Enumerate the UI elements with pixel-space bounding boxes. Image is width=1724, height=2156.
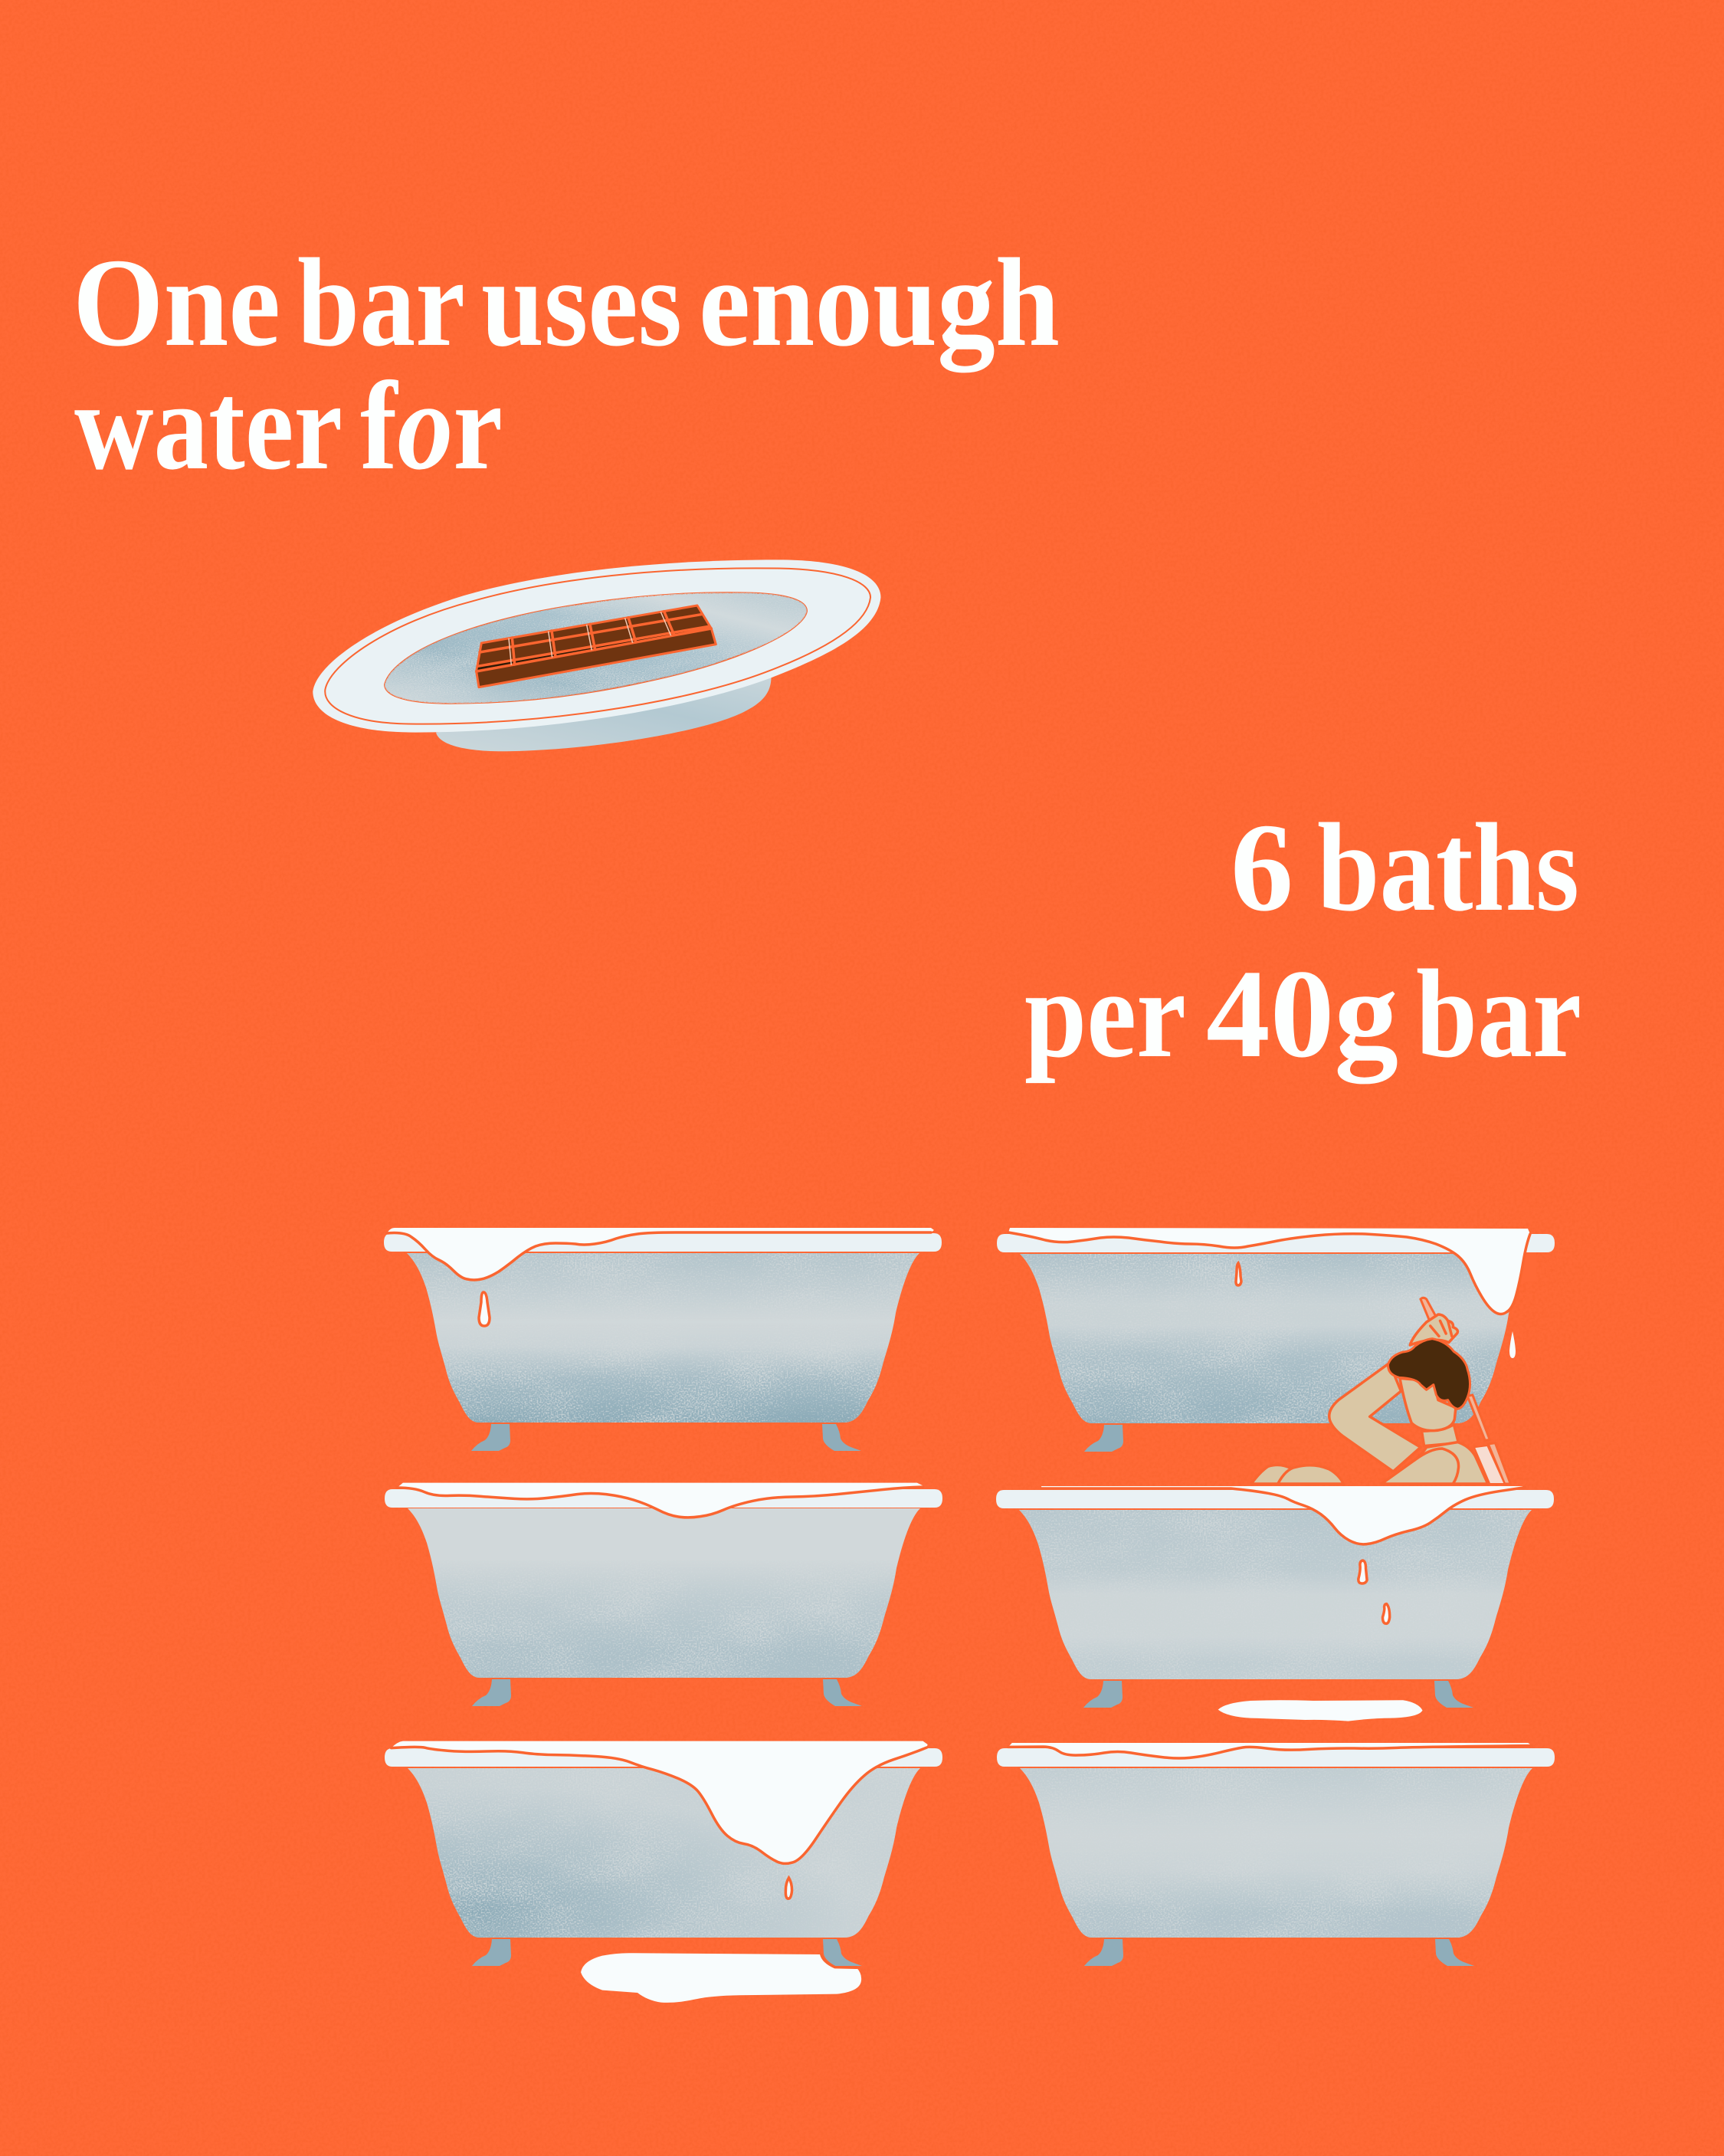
person bathing with back brush xyxy=(1251,1298,1510,1484)
illustration: chocolate bar on a plate xyxy=(313,560,880,751)
plate xyxy=(313,560,880,751)
overflowing water xyxy=(1008,1743,1532,1758)
bathtub: bottom right xyxy=(997,1743,1555,1966)
bathtub: top left xyxy=(384,1228,942,1451)
water drop xyxy=(1236,1263,1241,1285)
bathtub: middle left xyxy=(385,1483,942,1706)
bathtub: middle right xyxy=(996,1486,1554,1721)
title: bar xyxy=(297,232,465,372)
bathtub: top right xyxy=(997,1228,1555,1452)
overflowing water, drops and puddle xyxy=(1041,1486,1525,1721)
water drop outside tub xyxy=(1509,1331,1516,1358)
title: water xyxy=(74,356,343,496)
heading: 6 baths per 40g bar: 40g xyxy=(1206,943,1398,1085)
bathtub: bottom left xyxy=(385,1741,942,2003)
chocolate bar xyxy=(477,605,716,687)
overflowing water xyxy=(397,1483,923,1518)
overflowing water xyxy=(387,1228,934,1280)
title xyxy=(73,232,1060,496)
overflowing water, drop and puddle xyxy=(392,1741,928,2003)
title: enough xyxy=(699,232,1060,373)
heading: 6 baths per 40g bar xyxy=(1024,797,1581,1085)
heading: 6 baths per 40g bar: bar xyxy=(1416,943,1581,1084)
title: for xyxy=(360,356,503,496)
title: uses xyxy=(481,232,682,372)
water drop xyxy=(479,1292,490,1326)
overflowing water xyxy=(1008,1228,1530,1314)
heading: 6 baths per 40g bar: 6 xyxy=(1231,797,1293,937)
heading: 6 baths per 40g bar: per xyxy=(1024,943,1186,1084)
heading: 6 baths per 40g bar: baths xyxy=(1317,797,1579,937)
title: One xyxy=(73,232,280,372)
